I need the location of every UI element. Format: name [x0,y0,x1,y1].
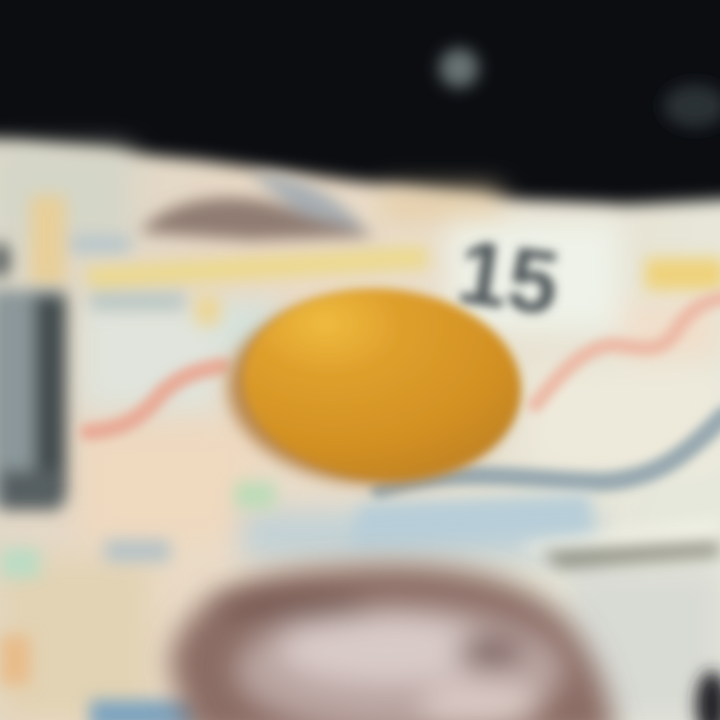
pale blue band below chart [350,495,720,555]
dark oval engraving near top [140,174,375,240]
portrait on banknote [170,565,616,720]
bottom right shadow band and dark corner [540,542,720,720]
blue line chart [380,415,720,490]
red line chart left [88,366,222,432]
chart band: yellow stripes [30,195,720,325]
vertical dark column on left [0,242,66,510]
coin shadow [222,290,518,494]
blurred number 15: 15 [452,222,565,335]
paper colour patches [0,150,720,720]
red line chart right [535,298,720,405]
small green and blue patches [0,482,275,720]
portrait face details [210,596,565,720]
blurred lights at top [439,48,720,128]
gold coin [237,280,527,488]
